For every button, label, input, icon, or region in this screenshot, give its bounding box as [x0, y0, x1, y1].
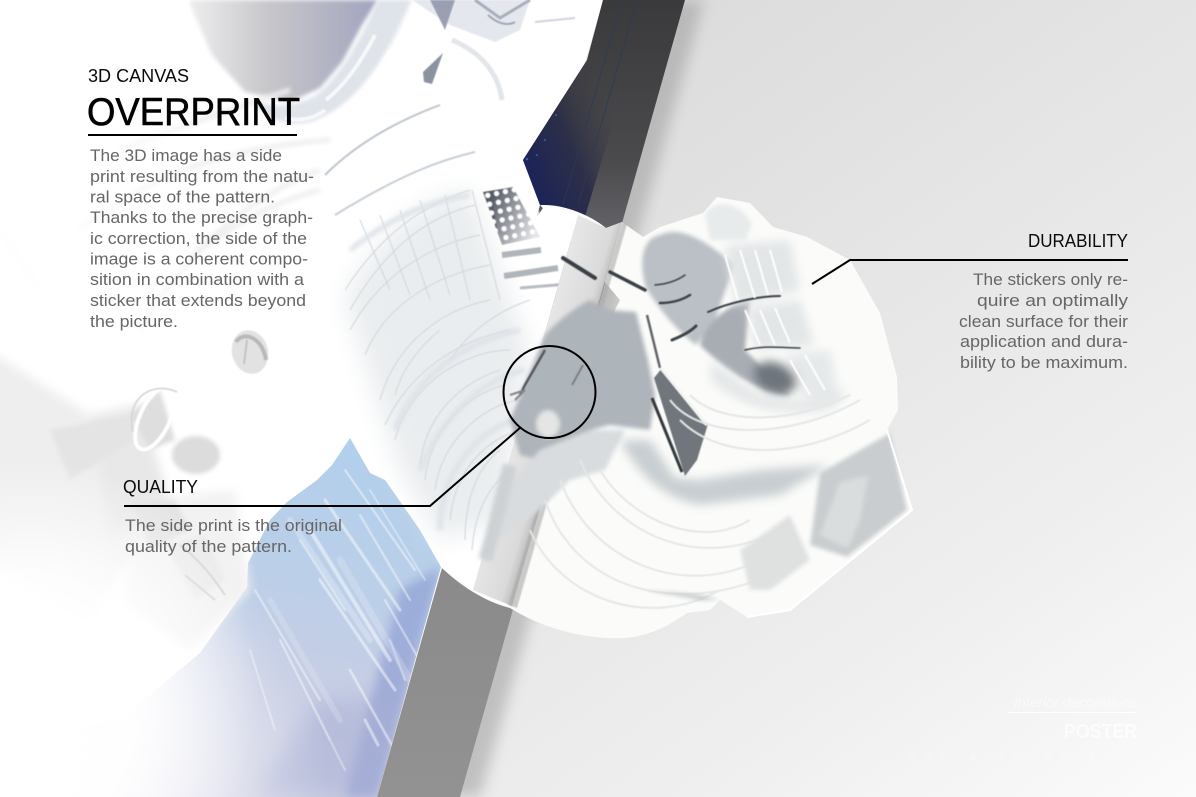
eyebrow: 3D CANVAS [88, 66, 189, 86]
helmet visor [188, 0, 378, 102]
magnifier circle [504, 346, 596, 438]
quality heading: QUALITY [123, 477, 198, 497]
sticker: astronaut hand extending beyond the picture [325, 105, 912, 638]
durability text: clean surface for their [959, 312, 1128, 331]
text block: overprint description: print resulting from the natu- [90, 167, 314, 186]
text block: overprint description: sticker that extends beyond [90, 291, 306, 310]
cloud streaks [250, 470, 425, 770]
callout: durability [812, 231, 1129, 372]
durability text: The stickers only re- [973, 270, 1128, 289]
helmet ring [250, 0, 412, 123]
space behind astronaut [523, 0, 650, 250]
text block: overprint description: sition in combination with a [90, 270, 305, 289]
sticker shading [485, 204, 790, 560]
text block: overprint description: ic correction, the side of the [90, 229, 307, 248]
star specks [526, 114, 557, 160]
suit sleeve strokes [325, 105, 530, 550]
quality text: quality of the pattern. [125, 537, 292, 556]
watermark: WWW.ARTCANVAS.PL [907, 752, 1135, 762]
quality text: The side print is the original [125, 516, 342, 535]
durability text: application and dura- [960, 332, 1128, 351]
text block: overprint description: ral space of the pattern. [90, 188, 275, 206]
fold shadow on wall [430, 0, 704, 797]
durability heading: DURABILITY [1028, 231, 1128, 251]
quality text [125, 516, 342, 556]
suit sleeve tone [345, 190, 530, 540]
durability text: bility to be maximum. [960, 353, 1128, 372]
durability text [959, 270, 1129, 372]
title rule [88, 134, 297, 136]
pocket and tool lower right [645, 433, 907, 600]
durability leader line [812, 260, 1128, 284]
text block: overprint description: image is a coherent compo- [90, 250, 308, 268]
circle interior tone lines [510, 350, 583, 400]
sleeve arcs [530, 395, 870, 608]
dark cuff slot [647, 315, 708, 476]
title: OVERPRINT [87, 91, 300, 134]
poster image panel [0, 0, 685, 797]
knuckle folds [725, 250, 825, 395]
faint texture top left [0, 90, 330, 330]
fabric tone near cuff [620, 360, 850, 505]
heading: 3D canvas overprint [87, 66, 300, 136]
flag patch on the sleeve [483, 187, 568, 288]
durability text: quire an optimally [977, 291, 1129, 310]
watermark: POSTER [1064, 721, 1137, 743]
folded strip [473, 215, 622, 606]
watermark: Interior decorations [1014, 694, 1137, 710]
helmet neck details [412, 0, 575, 100]
faint equipment at left [0, 345, 250, 650]
callout: quality [123, 346, 596, 556]
sticker silhouette [442, 197, 912, 638]
text block: overprint description: the picture. [90, 312, 178, 331]
sticker outer contour [747, 430, 912, 617]
finger lines [563, 258, 800, 350]
earth [161, 438, 441, 797]
ribbed glove tone [725, 240, 840, 400]
dark fold band [377, 0, 685, 797]
quality leader line [124, 427, 521, 506]
text block: overprint description [90, 146, 314, 331]
left white fade [0, 0, 190, 340]
text block: overprint description: Thanks to the precise graph- [90, 208, 313, 227]
small gauge [227, 326, 273, 378]
watermark [907, 694, 1137, 762]
lower-left white fade [0, 440, 270, 797]
text block: overprint description: The 3D image has a side [90, 146, 282, 165]
